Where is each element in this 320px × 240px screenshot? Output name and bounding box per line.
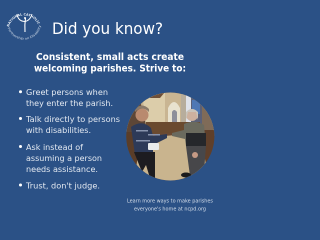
bullet: ask instead: needs assistance.: [26, 165, 98, 174]
footer note: everyone's home at ncpd.org: [134, 206, 206, 212]
logo: National Catholic Partnership on Disability: NATIONAL CATHOLIC: [6, 13, 40, 27]
bullet: ask instead: assuming a person: [26, 154, 102, 163]
infographic canvas: [6, 13, 214, 212]
heading: Consistent, small acts create: [36, 52, 184, 63]
bullet list: [19, 88, 120, 190]
left person: [131, 106, 167, 178]
logo: National Catholic Partnership on Disability: Partnership on Disability: [8, 25, 42, 40]
title: Did you know?: [52, 19, 163, 38]
bullet: greet: they enter the parish.: [26, 99, 113, 108]
background: [0, 0, 220, 220]
heading: welcoming parishes. Strive to:: [34, 64, 186, 74]
footer note: Learn more ways to make parishes: [127, 198, 213, 204]
bullet: ask instead: [19, 143, 102, 174]
bullet: talk directly: [19, 115, 120, 135]
floor: [136, 135, 206, 180]
circular photo: two people greeting in a church: [126, 92, 216, 185]
church walls and arches: [126, 92, 215, 136]
bullet: ask instead: Ask instead of: [26, 143, 83, 152]
footer note: [127, 198, 213, 212]
pews: [146, 122, 200, 133]
bullet: trust: Trust, don't judge.: [25, 182, 100, 190]
bullet: talk directly: with disabilities.: [26, 126, 91, 135]
bullet: greet: Greet persons when: [26, 88, 108, 97]
right person: [172, 109, 206, 178]
heading: [34, 52, 186, 74]
bullet: greet: [19, 88, 113, 108]
bullet: talk directly: Talk directly to persons: [25, 115, 120, 124]
logo: National Catholic Partnership on Disability: [6, 13, 42, 40]
